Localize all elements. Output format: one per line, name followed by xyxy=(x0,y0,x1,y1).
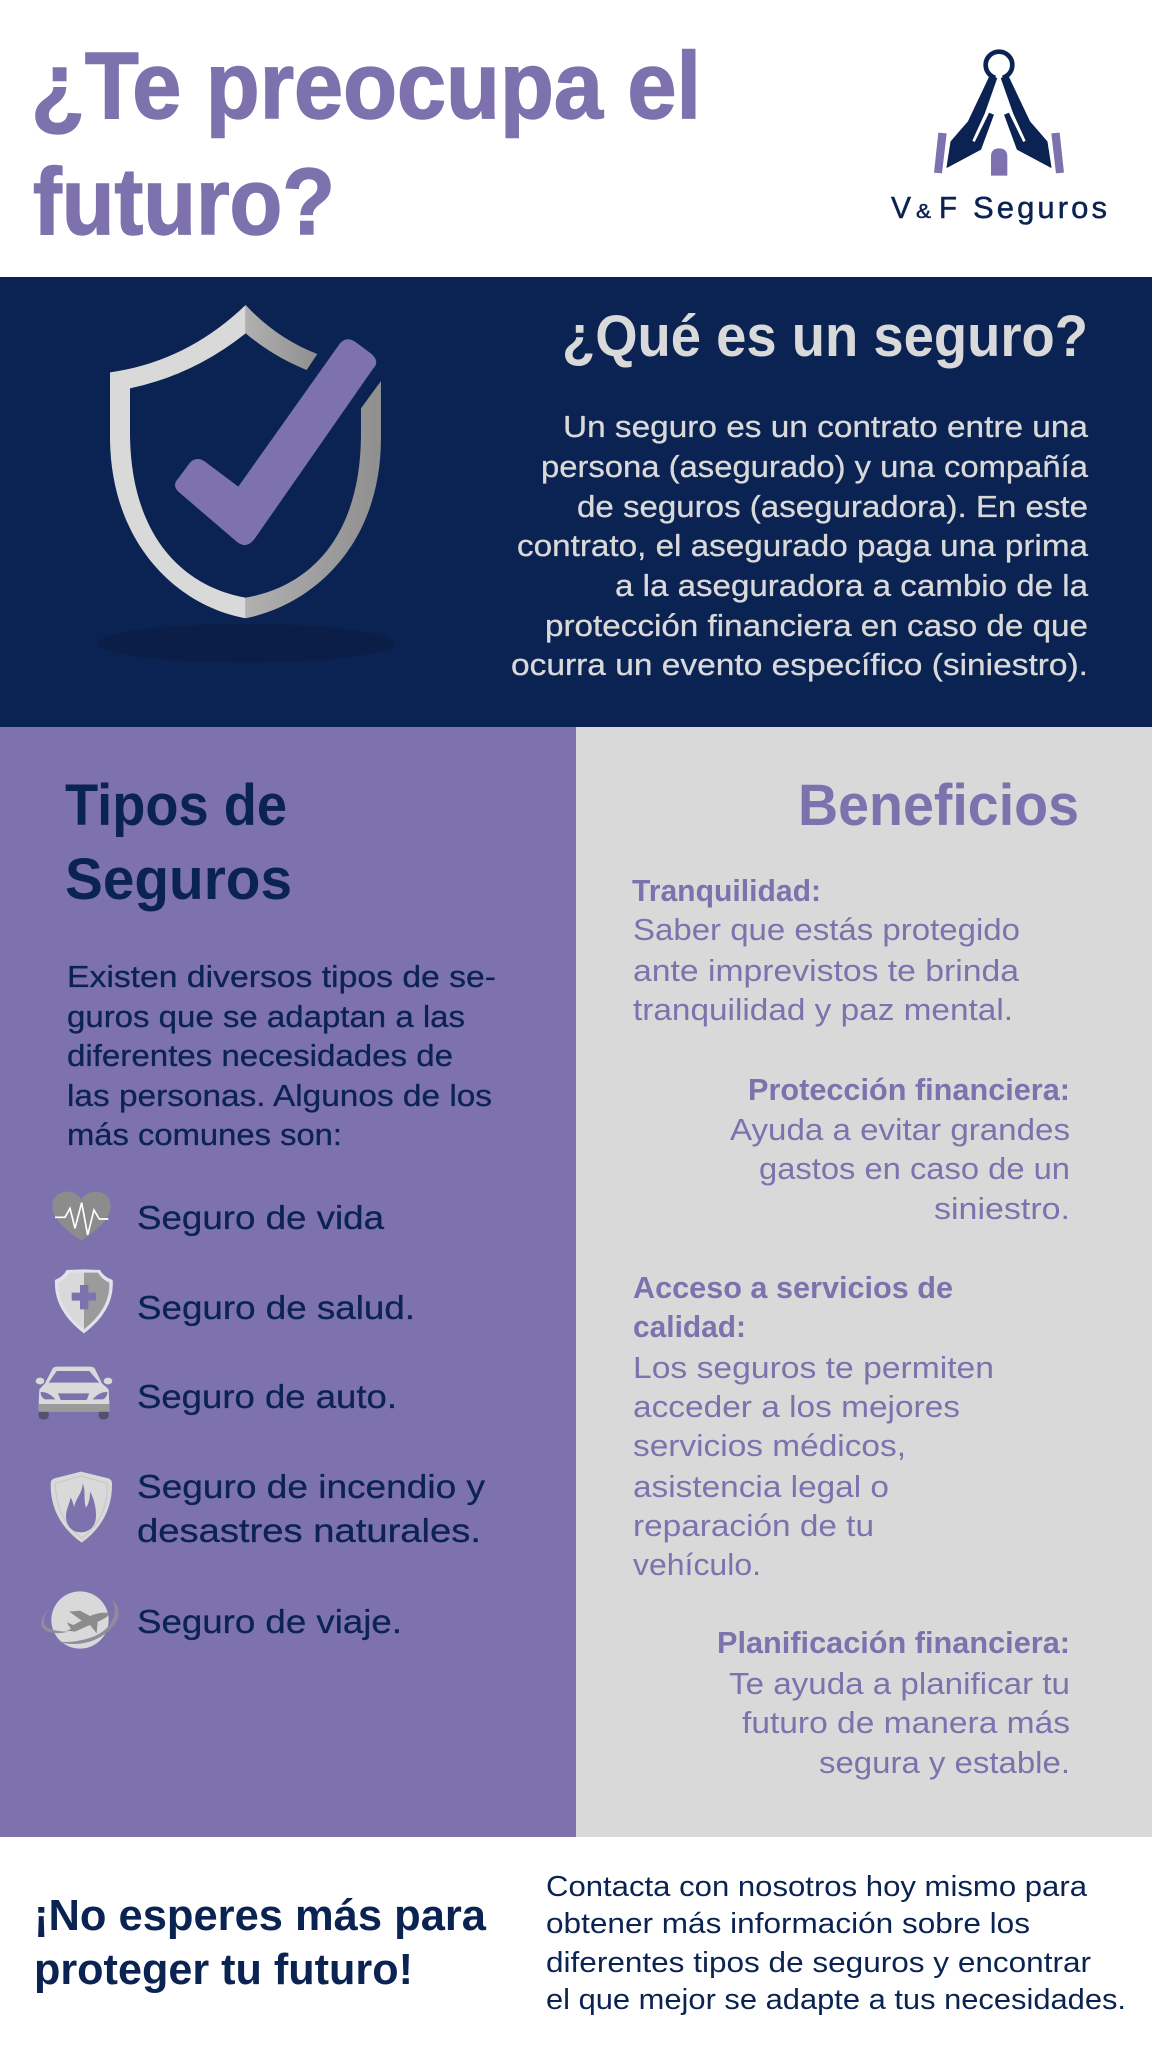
benefit: Planificación financiera: Planificación financiera: xyxy=(717,1625,1070,1660)
logo wordmark: Seguros xyxy=(973,190,1107,225)
logo wordmark: & xyxy=(916,201,932,223)
logo wordmark xyxy=(891,190,1107,225)
benefit: Planificación financiera: segura y estable. xyxy=(819,1745,1070,1780)
heading: ¿Qué es un seguro?: ¿Qué es un seguro? xyxy=(562,304,1088,369)
icon: heart pulse xyxy=(52,1192,111,1241)
text: definition: protección financiera en caso de que xyxy=(545,608,1088,643)
benefit: Acceso a servicios de calidad: calidad: xyxy=(633,1309,746,1344)
heading: Tipos de Seguros xyxy=(65,773,292,912)
title: ¿Te preocupa el xyxy=(31,33,701,139)
text: intro: Existen diversos tipos de se- xyxy=(67,959,496,994)
benefit: Acceso a servicios de calidad: Los seguros te permiten xyxy=(633,1350,994,1385)
benefit: Tranquilidad: Tranquilidad: xyxy=(632,873,821,908)
text: intro: más comunes son: xyxy=(67,1117,342,1152)
icon: fire shield xyxy=(51,1472,112,1543)
benefit: Tranquilidad: ante imprevistos te brinda xyxy=(633,953,1020,988)
list item: Seguro de incendio: desastres naturales. xyxy=(137,1512,481,1549)
benefit: Protección financiera xyxy=(730,1072,1070,1226)
title: futuro? xyxy=(33,149,335,255)
list item: Seguro de vida: Seguro de vida xyxy=(137,1199,385,1236)
text: definition: contrato, el asegurado paga una prima xyxy=(517,528,1089,563)
callout: No esperes más: ¡No esperes más para xyxy=(34,1891,487,1940)
icon: shield with check xyxy=(97,305,394,663)
benefit: Planificación financiera: Te ayuda a planificar tu xyxy=(729,1666,1070,1701)
callout: No esperes más: proteger tu futuro! xyxy=(34,1945,413,1994)
benefit: Protección financiera: siniestro. xyxy=(934,1191,1070,1226)
title xyxy=(31,33,701,255)
heading: Tipos de Seguros: Tipos de xyxy=(65,773,287,838)
text: contact: obtener más información sobre los xyxy=(546,1908,1030,1940)
text: contact: Contacta con nosotros hoy mismo para xyxy=(546,1871,1088,1903)
text: contact: el que mejor se adapte a tus necesidades. xyxy=(546,1984,1126,2016)
benefit: Acceso a servicios de calidad xyxy=(633,1270,994,1582)
heading: Beneficios: Beneficios xyxy=(798,773,1079,838)
callout: No esperes más xyxy=(34,1891,487,1994)
benefit: Tranquilidad: tranquilidad y paz mental. xyxy=(633,992,1013,1027)
logo: V&F Seguros xyxy=(891,52,1107,225)
benefit: Protección financiera: gastos en caso de un xyxy=(759,1151,1070,1186)
benefit: Protección financiera: Protección financiera: xyxy=(748,1072,1070,1107)
text: definition: a la aseguradora a cambio de la xyxy=(615,568,1089,603)
list item: Seguro de incendio xyxy=(137,1468,486,1549)
logo wordmark: V xyxy=(891,190,911,225)
panel: ¿Qué es un seguro? xyxy=(0,277,1152,727)
benefit: Planificación financiera xyxy=(717,1625,1070,1780)
icon: globe and plane xyxy=(41,1591,119,1649)
text: definition: de seguros (aseguradora). En este xyxy=(577,489,1088,524)
text: contact: diferentes tipos de seguros y encontrar xyxy=(546,1947,1091,1979)
benefit: Acceso a servicios de calidad: vehículo. xyxy=(633,1547,761,1582)
benefit: Tranquilidad: Saber que estás protegido xyxy=(633,912,1020,947)
benefit: Protección financiera: Ayuda a evitar grandes xyxy=(730,1112,1070,1147)
text: definition: ocurra un evento específico (siniestro). xyxy=(511,647,1088,682)
logo wordmark: F xyxy=(939,190,957,225)
text: definition xyxy=(511,409,1089,682)
text: definition: persona (asegurado) y una compañía xyxy=(541,449,1089,484)
panel: Beneficios xyxy=(576,727,1152,1837)
text: intro: guros que se adaptan a las xyxy=(67,999,465,1034)
benefit: Planificación financiera: futuro de manera más xyxy=(742,1705,1070,1740)
text: contact xyxy=(546,1871,1126,2016)
icon: praying hands xyxy=(934,52,1064,176)
icon: car xyxy=(36,1367,112,1419)
benefit: Acceso a servicios de calidad: servicios médicos, xyxy=(633,1428,906,1463)
text: definition: Un seguro es un contrato entre una xyxy=(563,409,1089,444)
benefit: Acceso a servicios de calidad: Acceso a servicios de xyxy=(633,1270,953,1305)
heading: Tipos de Seguros: Seguros xyxy=(65,847,292,912)
benefit: Acceso a servicios de calidad: acceder a los mejores xyxy=(633,1389,960,1424)
list item: Seguro de incendio: Seguro de incendio y xyxy=(137,1468,486,1505)
icon: health shield xyxy=(55,1269,113,1333)
benefit: Acceso a servicios de calidad: reparación de tu xyxy=(633,1508,874,1543)
list item: Seguro de salud: Seguro de salud. xyxy=(137,1289,415,1326)
list item: Seguro de auto: Seguro de auto. xyxy=(137,1378,397,1415)
list item: Seguro de viaje: Seguro de viaje. xyxy=(137,1603,402,1640)
benefit: Acceso a servicios de calidad: asistencia legal o xyxy=(633,1469,889,1504)
panel: Tipos de Seguros xyxy=(0,727,576,1837)
text: intro: las personas. Algunos de los xyxy=(67,1078,492,1113)
text: intro: diferentes necesidades de xyxy=(67,1038,453,1073)
text: intro xyxy=(67,959,496,1152)
benefit: Tranquilidad xyxy=(632,873,1020,1027)
